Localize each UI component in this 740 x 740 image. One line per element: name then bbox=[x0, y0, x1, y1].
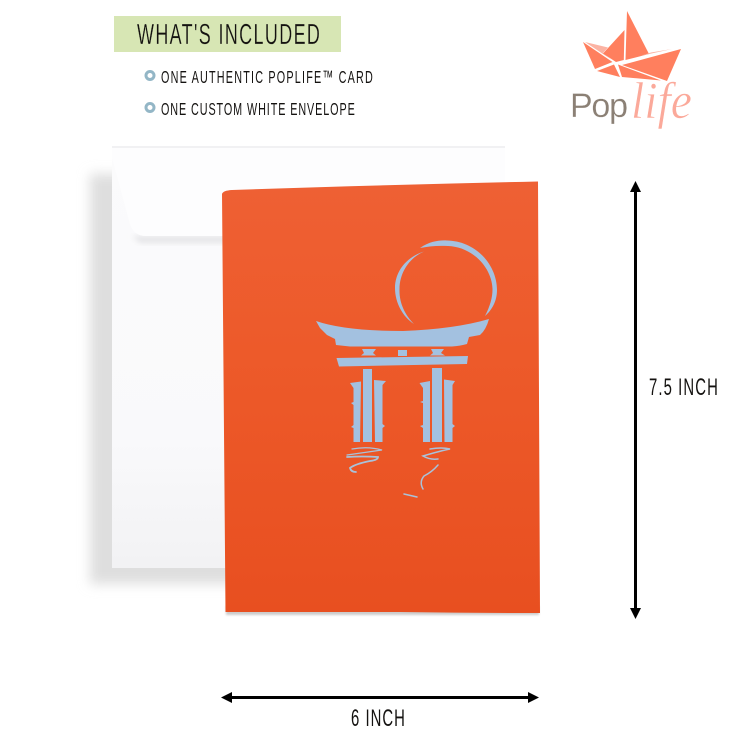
left pillars bbox=[363, 369, 372, 442]
card shadow bbox=[226, 606, 539, 615]
envelope body bbox=[112, 146, 505, 568]
tie beam details bbox=[361, 349, 376, 356]
water reflections bbox=[347, 448, 450, 497]
envelope bbox=[90, 146, 505, 584]
heading: what's included: WHAT'S INCLUDED bbox=[137, 19, 320, 51]
torii gate cutout bbox=[316, 240, 497, 497]
envelope flap shadow bbox=[132, 236, 400, 243]
roof bbox=[316, 319, 489, 346]
list: included items: ONE CUSTOM WHITE ENVELOPE bbox=[161, 100, 355, 120]
list: included items: ONE AUTHENTIC POPLIFE™ CARD bbox=[161, 68, 373, 88]
logo: poplife bbox=[570, 11, 692, 130]
logo: poplife: life bbox=[631, 73, 692, 130]
label: width: 6 INCH bbox=[351, 706, 405, 732]
arrow: width dimension bbox=[221, 692, 539, 703]
card front bbox=[222, 182, 540, 613]
moon ring bbox=[420, 240, 497, 316]
envelope flap bbox=[112, 146, 505, 236]
right pillars bbox=[432, 368, 442, 442]
envelope shadow bbox=[90, 174, 240, 584]
crossbeam bbox=[336, 356, 468, 366]
greeting card bbox=[222, 182, 540, 615]
arrow: height dimension bbox=[630, 181, 641, 619]
label: height: 7.5 INCH bbox=[649, 375, 718, 401]
list: included items bbox=[146, 68, 373, 120]
logo: poplife: Pop bbox=[570, 87, 628, 125]
